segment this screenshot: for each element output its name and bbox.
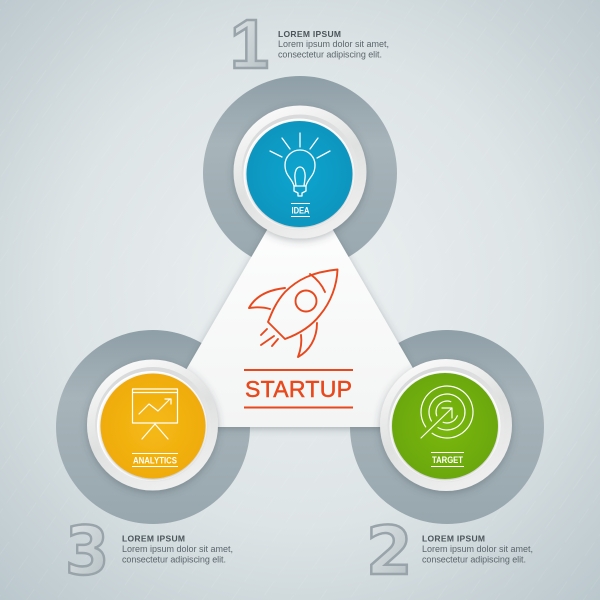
text block 2 <box>422 534 533 564</box>
icon: green disc <box>392 373 498 479</box>
label: target: TARGET <box>432 455 463 465</box>
number 2: 2 <box>366 512 413 590</box>
number 1: 1 <box>230 5 269 83</box>
number 3: 3 <box>65 512 109 590</box>
label: idea: IDEA <box>292 206 310 216</box>
title: startup <box>244 370 353 408</box>
icon: yellow disc <box>100 374 206 478</box>
text block 3: consectetur adipiscing elit. <box>122 554 226 564</box>
text block 1 <box>278 29 389 60</box>
text block 1: Lorem ipsum dolor sit amet, <box>278 39 389 49</box>
icon: target and arrow <box>421 386 473 438</box>
panel: gray discs <box>56 76 544 524</box>
text block 2: Lorem ipsum dolor sit amet, <box>422 544 533 554</box>
panel: target circle <box>380 359 512 491</box>
panel: analytics circle <box>87 360 218 490</box>
panel: central white triangle <box>153 173 447 427</box>
icon: light bulb <box>270 133 330 196</box>
text block 1: LOREM IPSUM <box>278 29 341 39</box>
text block 3 <box>122 534 233 564</box>
text block 2: LOREM IPSUM <box>422 534 485 544</box>
text block 1: consectetur adipiscing elit. <box>278 50 382 60</box>
icon: presentation board <box>132 389 178 439</box>
icon: rocket <box>249 270 338 357</box>
text block 3: LOREM IPSUM <box>122 534 185 544</box>
text block 2: consectetur adipiscing elit. <box>422 554 526 564</box>
title: startup: STARTUP <box>245 376 352 402</box>
label: analytics: ANALYTICS <box>133 456 177 466</box>
icon: blue disc <box>246 121 352 227</box>
text block 3: Lorem ipsum dolor sit amet, <box>122 544 233 554</box>
panel: idea circle <box>234 106 366 238</box>
